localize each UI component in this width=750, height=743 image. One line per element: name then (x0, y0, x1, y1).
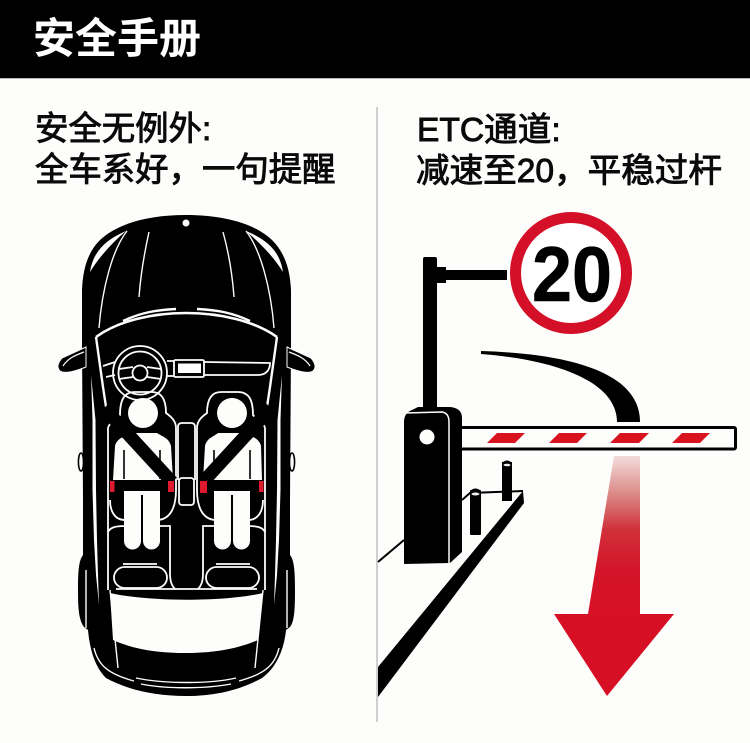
car top view illustration (58, 215, 315, 696)
door handles (78, 453, 295, 471)
seats (108, 392, 265, 590)
left heading: 安全无例外: (35, 111, 211, 148)
speed limit sign: 20 (532, 230, 612, 318)
car body silhouette (78, 215, 295, 696)
right heading: 减速至20，平稳过杆 (416, 152, 722, 190)
road kerb (378, 491, 524, 697)
roof highlights (90, 220, 283, 272)
seat belt (104, 408, 172, 482)
barrier cabinet (404, 407, 462, 564)
dash display (178, 364, 201, 373)
barrier arm (455, 428, 736, 449)
driver figure (104, 398, 174, 550)
mirror left (58, 347, 86, 372)
title: 安全手册 (33, 15, 201, 62)
sign pole (423, 257, 507, 410)
road edge line (378, 491, 523, 562)
speed limit sign (516, 218, 626, 328)
mirror glints (63, 352, 310, 366)
windscreen (96, 313, 277, 337)
buckles (200, 481, 207, 493)
buckles (110, 481, 114, 492)
right heading: ETC通道: (417, 111, 561, 149)
bollard far (502, 460, 512, 501)
steering wheel (113, 346, 167, 400)
rear details (86, 570, 287, 688)
seat belt (203, 408, 271, 482)
rear window (110, 593, 263, 653)
side slivers (91, 375, 282, 605)
bollard near (470, 488, 481, 535)
red down arrow (554, 456, 674, 696)
left heading: 全车系好，一句提醒 (35, 152, 336, 189)
header bar (0, 0, 750, 79)
mirror right (287, 347, 315, 372)
curved road line (481, 351, 640, 422)
passenger figure (200, 398, 271, 550)
dash (204, 362, 270, 375)
